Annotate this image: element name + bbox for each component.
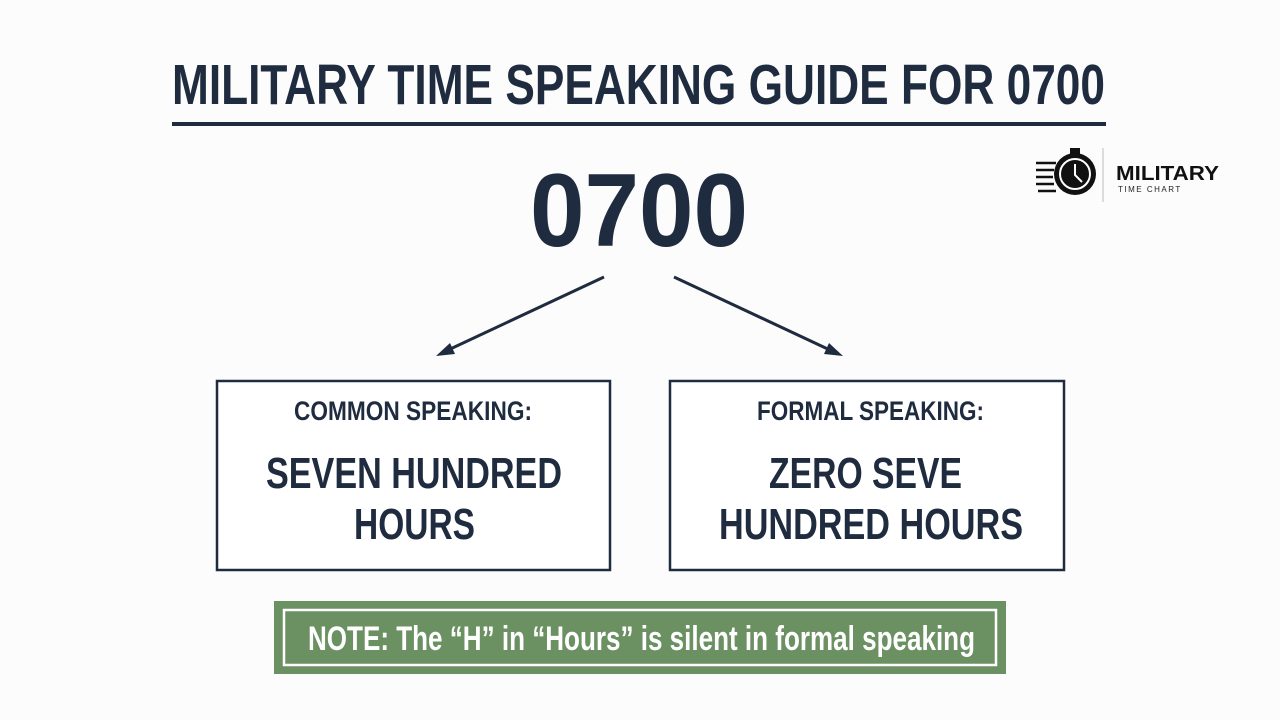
arrow: right <box>674 277 843 356</box>
panel: formal speaking <box>670 381 1064 570</box>
logo: military time chart: TIME CHART <box>1118 185 1182 194</box>
panel: common speaking: COMMON SPEAKING: <box>294 396 532 426</box>
panel: formal speaking: FORMAL SPEAKING: <box>757 396 984 426</box>
logo: military time chart: MILITARY <box>1116 163 1220 185</box>
arrow: left <box>436 277 604 356</box>
panel: common speaking: SEVEN HUNDRED <box>266 449 562 498</box>
callout: note <box>274 601 1006 674</box>
logo: military time chart <box>1036 148 1220 202</box>
callout: note: NOTE: The “H” in “Hours” is silent in formal speaking <box>308 620 975 658</box>
panel: common speaking: HOURS <box>354 500 475 549</box>
panel: common speaking <box>217 381 610 570</box>
panel: formal speaking: HUNDRED HOURS <box>719 500 1023 549</box>
big time 0700: 0700 <box>530 153 748 269</box>
panel: formal speaking: ZERO SEVE <box>769 449 962 498</box>
